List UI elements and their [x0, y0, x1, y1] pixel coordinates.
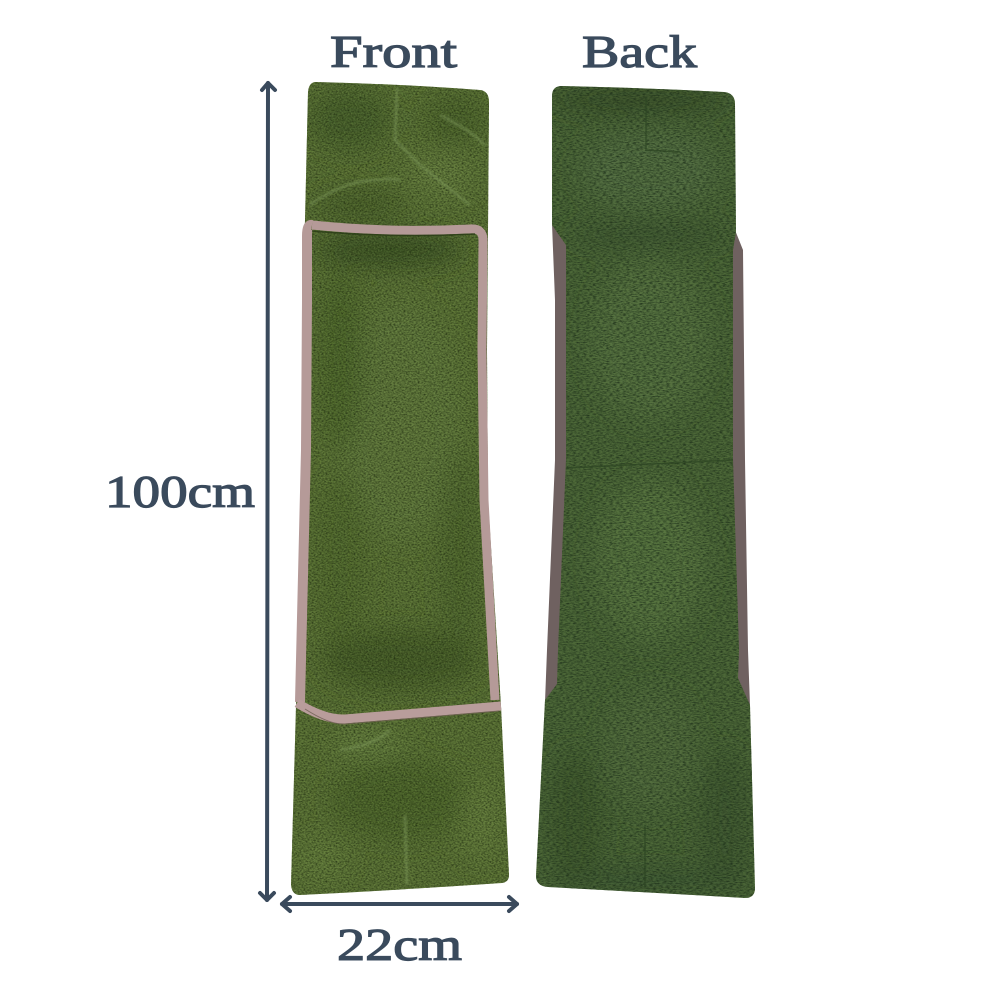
back seams	[566, 97, 735, 888]
front fabric	[285, 78, 515, 900]
arrow: 22cm width	[282, 897, 517, 911]
front fold lines	[310, 88, 485, 885]
back shading	[549, 90, 750, 890]
panel: back of towel	[530, 82, 760, 902]
front binding	[297, 225, 501, 724]
front fur texture	[285, 78, 515, 900]
heading: Back: Back	[582, 27, 698, 77]
label: 22cm: 22cm	[337, 920, 462, 970]
heading: Front: Front	[330, 27, 458, 77]
back side strips	[545, 224, 750, 706]
front shading	[294, 90, 500, 880]
panel: front of towel	[285, 78, 515, 900]
back fabric texture	[530, 82, 760, 902]
back fabric	[530, 82, 760, 902]
label: 100cm: 100cm	[105, 467, 255, 517]
arrow: 100cm height	[260, 83, 275, 900]
